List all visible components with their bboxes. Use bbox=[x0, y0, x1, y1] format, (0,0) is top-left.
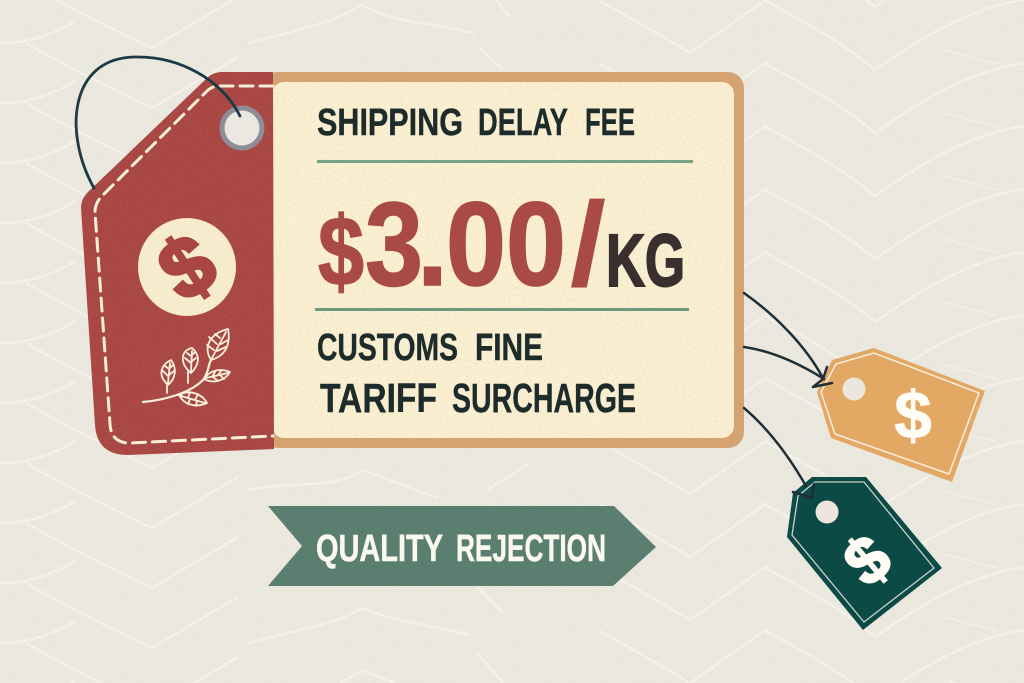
icon: leaf sprig bbox=[143, 329, 230, 406]
unit: KG: K bbox=[606, 219, 645, 302]
panel: red tag end bbox=[80, 70, 276, 458]
price: $3.00/: 3 bbox=[365, 178, 423, 311]
price: $3.00/: 0 bbox=[446, 178, 506, 311]
string loop bbox=[76, 57, 240, 188]
small tag: dark green bbox=[787, 477, 942, 630]
text: customs fine: CUSTOMS bbox=[317, 327, 458, 369]
heading: shipping delay fee: SHIPPING bbox=[317, 102, 463, 144]
text: tariff surcharge bbox=[320, 375, 636, 421]
text: tariff surcharge: TARIFF bbox=[320, 375, 437, 421]
unit: KG: G bbox=[645, 219, 685, 302]
price: $3.00/: 0 bbox=[506, 178, 566, 311]
price: $3.00/: / bbox=[570, 178, 606, 311]
panel: cream card with tan border bbox=[262, 72, 744, 448]
price: $3.00/: . bbox=[417, 178, 448, 311]
unit: KG bbox=[606, 219, 685, 302]
price: $3.00/: $ bbox=[318, 196, 364, 306]
price tag bbox=[76, 57, 744, 458]
eyelet bbox=[220, 106, 264, 150]
arrows: strings to small tags bbox=[744, 293, 832, 498]
icon: dollar badge: $ bbox=[142, 215, 232, 319]
heading: shipping delay fee bbox=[317, 102, 635, 144]
small tag: orange bbox=[817, 348, 985, 482]
small tag: orange: $ bbox=[894, 378, 932, 453]
ribbon: quality rejection: QUALITY bbox=[316, 528, 443, 570]
text: tariff surcharge: SURCHARGE bbox=[452, 375, 636, 421]
small tag: dark green: $ bbox=[829, 520, 905, 600]
heading: shipping delay fee: FEE bbox=[585, 102, 635, 144]
divider bottom bbox=[315, 308, 689, 311]
ribbon: quality rejection: REJECTION bbox=[456, 528, 606, 570]
price: $3.00/ bbox=[318, 178, 606, 311]
divider top bbox=[317, 160, 693, 163]
ribbon: quality rejection bbox=[268, 506, 656, 586]
stitching bbox=[95, 86, 273, 443]
heading: shipping delay fee: DELAY bbox=[478, 102, 568, 144]
text: customs fine: FINE bbox=[475, 327, 543, 369]
